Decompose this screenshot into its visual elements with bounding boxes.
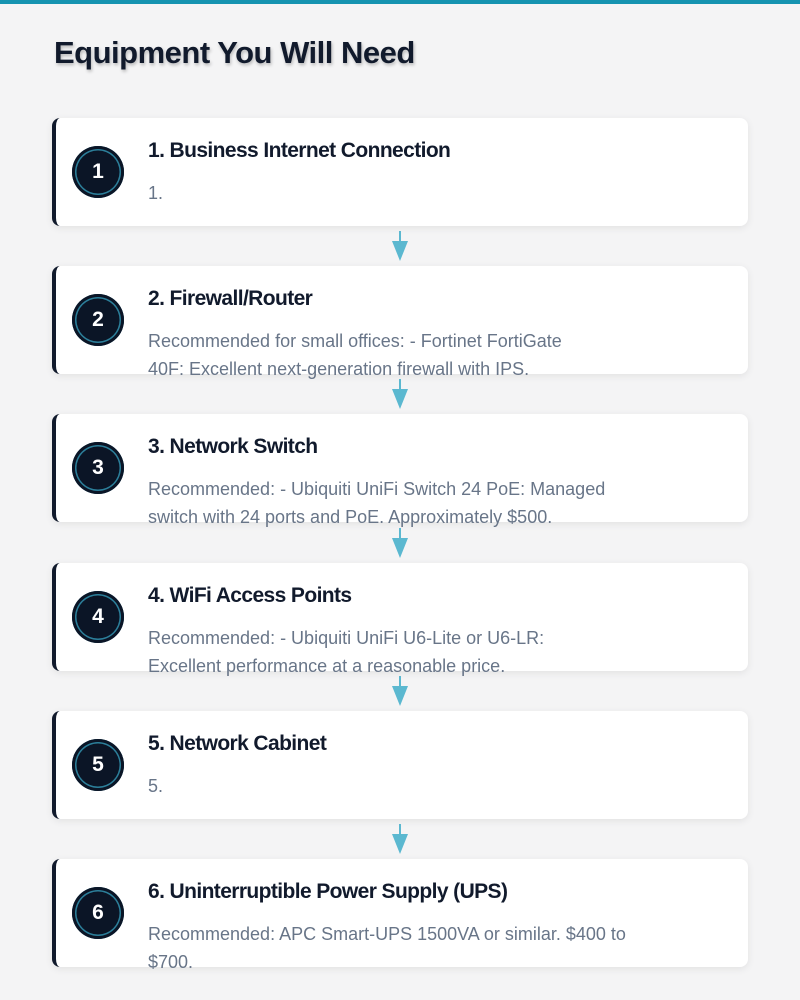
card 6 bbox=[52, 859, 748, 967]
card 2: 40F: Excellent next-generation firewall with IPS. bbox=[148, 359, 529, 379]
card 2: 2. Firewall/Router bbox=[148, 287, 312, 310]
card 3: Recommended: - Ubiquiti UniFi Switch 24 PoE: Managed bbox=[148, 479, 605, 499]
card 1: 1 bbox=[92, 160, 104, 183]
card 6: $700. bbox=[148, 952, 193, 972]
card 2 bbox=[52, 266, 748, 374]
card 4 bbox=[52, 563, 748, 671]
card 3: 3 bbox=[92, 456, 104, 479]
card 3 bbox=[52, 414, 748, 522]
card 4: Recommended: - Ubiquiti UniFi U6-Lite or U6-LR: bbox=[148, 628, 544, 648]
card 5 bbox=[52, 711, 748, 819]
card 6: Recommended: APC Smart-UPS 1500VA or similar. $400 to bbox=[148, 924, 626, 944]
card 5: 5. Network Cabinet bbox=[148, 732, 326, 755]
card 4: Excellent performance at a reasonable price. bbox=[148, 656, 505, 676]
title: Equipment You Will Need bbox=[54, 35, 415, 70]
card 5: 5 bbox=[92, 753, 104, 776]
card 3: switch with 24 ports and PoE. Approximately $500. bbox=[148, 507, 552, 527]
card 2: 2 bbox=[92, 308, 104, 331]
card 3: 3. Network Switch bbox=[148, 435, 318, 458]
card 5: 5. bbox=[148, 776, 163, 796]
arrow 5 bbox=[392, 824, 408, 854]
card 2: Recommended for small offices: - Fortinet FortiGate bbox=[148, 331, 562, 351]
card 4: 4 bbox=[92, 605, 104, 628]
arrow 3 bbox=[392, 528, 408, 558]
card 1: 1. Business Internet Connection bbox=[148, 139, 450, 162]
arrow 2 bbox=[392, 379, 408, 409]
arrow 1 bbox=[392, 231, 408, 261]
card 4: 4. WiFi Access Points bbox=[148, 584, 352, 607]
card 1 bbox=[52, 118, 748, 226]
card 1: 1. bbox=[148, 183, 163, 203]
arrow 4 bbox=[392, 676, 408, 706]
card 6: 6 bbox=[92, 901, 104, 924]
card 6: 6. Uninterruptible Power Supply (UPS) bbox=[148, 880, 507, 903]
